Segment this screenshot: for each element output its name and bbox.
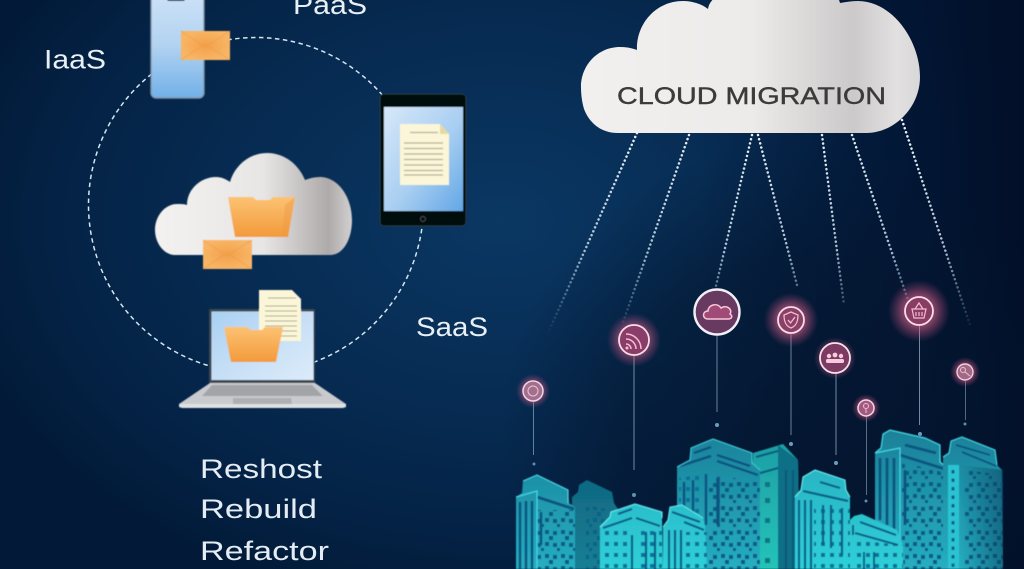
icon: folder in cloud	[228, 197, 295, 237]
pin: location key icon	[852, 394, 880, 502]
building: back left	[572, 480, 622, 569]
building: front left	[600, 504, 663, 569]
building: centre large	[677, 439, 760, 569]
building: left	[516, 475, 575, 569]
pin: cloud icon	[694, 290, 740, 427]
building: front centre	[663, 505, 707, 569]
title: CLOUD MIGRATION	[617, 83, 886, 110]
icon: central cloud with folder and envelope	[155, 153, 352, 269]
pin: shopping basket icon	[888, 280, 950, 436]
label: IaaS: IaaS	[44, 44, 106, 74]
main cloud with title	[581, 0, 920, 133]
building: centre right tall	[753, 444, 800, 569]
building: tall far right	[875, 430, 950, 569]
text block: migration strategies	[200, 454, 329, 566]
pin: shield icon	[764, 293, 818, 446]
pin: search icon	[950, 357, 980, 426]
icon: tablet with document	[380, 94, 466, 226]
pin: people icon	[814, 337, 856, 465]
icon: laptop with folder and paper	[179, 290, 346, 408]
pin: wifi icon	[607, 313, 661, 497]
folder	[224, 327, 283, 362]
label: SaaS: SaaS	[416, 312, 488, 342]
building: far right	[943, 437, 1003, 569]
building: front low right	[850, 514, 903, 569]
dashed orbit circle	[88, 38, 424, 372]
text block: migration strategies: Reshost	[200, 454, 323, 484]
icon: envelope on cloud	[203, 240, 252, 269]
text block: migration strategies: Rebuild	[200, 494, 317, 524]
paper	[259, 290, 301, 341]
icon: phone	[151, 0, 204, 98]
text block: migration strategies: Refactor	[200, 536, 329, 566]
icon: envelope on phone	[181, 31, 230, 60]
dotted connectors from cloud	[545, 120, 970, 340]
building: mid right	[795, 470, 850, 569]
city skyline	[516, 430, 1003, 569]
pin: globe icon	[516, 374, 550, 466]
